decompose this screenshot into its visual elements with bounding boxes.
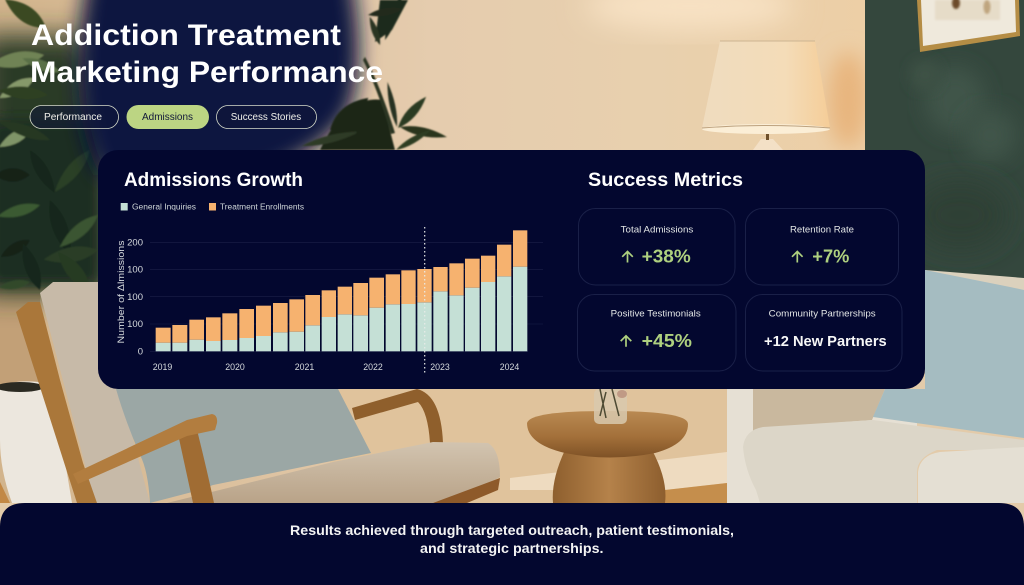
metric card: Positive Testimonials [578, 294, 736, 371]
legend: Treatment Enrollments [220, 202, 304, 212]
legend: General Inquiries [132, 202, 196, 212]
x-axis labels: 2019 [153, 362, 172, 372]
metric card: Community Partnerships [746, 294, 902, 371]
sofa [727, 270, 1024, 503]
dotted marker line [424, 227, 426, 374]
lamp [702, 41, 830, 150]
metric card: Positive Testimonials: Positive Testimonials [611, 309, 701, 320]
x-axis labels: 2022 [363, 362, 383, 372]
footer banner [0, 503, 1024, 585]
heading: Admissions Growth: Admissions Growth [124, 170, 303, 191]
right plant [301, 0, 448, 154]
left plant [0, 0, 106, 295]
bars: general inquiries [156, 267, 527, 351]
chair wood frame [16, 302, 97, 503]
pill: Admissions (active): Admissions [142, 112, 193, 123]
legend [121, 202, 304, 212]
y-axis labels: 100 [127, 319, 143, 330]
pill: Admissions (active) [126, 105, 209, 129]
title [30, 19, 383, 89]
baseboard and floor [510, 452, 727, 503]
side table and vase [527, 389, 688, 503]
stacked bar chart [116, 227, 543, 374]
axis title: Number of Δlmissions [116, 240, 126, 344]
gridlines [150, 242, 543, 351]
metric card: Total Admissions: +38% [642, 247, 691, 267]
front arm [178, 430, 214, 503]
heading: Success Metrics: Success Metrics [588, 170, 743, 191]
x-axis labels: 2023 [430, 362, 450, 372]
pill: Performance [30, 106, 118, 128]
y-axis labels: 200 [127, 238, 143, 248]
metric card: Retention Rate: +7% [812, 247, 849, 267]
filter pills [30, 105, 316, 129]
x-axis labels: 2021 [295, 362, 314, 372]
rear arm [352, 389, 443, 443]
blue cushion [873, 270, 1024, 438]
title backdrop: navy glow [78, 0, 359, 175]
footer text [290, 522, 734, 556]
x-axis labels [153, 362, 519, 372]
pill: Success Stories [216, 106, 316, 128]
y-axis labels: 0 [138, 346, 143, 358]
picture frame [917, 0, 1020, 52]
pill: Performance: Performance [44, 112, 102, 123]
seat cushion [167, 442, 500, 503]
metric card: Community Partnerships: +12 New Partners [764, 334, 887, 350]
armchair [16, 282, 500, 503]
plant pot [0, 381, 72, 503]
green wallpaper wall [865, 0, 1024, 285]
y-axis labels: 100 [127, 292, 143, 303]
x-axis labels: 2020 [225, 362, 245, 372]
title: Marketing Performance [30, 56, 383, 89]
main dashboard panel [98, 150, 925, 389]
metric card: Total Admissions: Total Admissions [621, 225, 694, 236]
footer text: and strategic partnerships. [420, 540, 604, 556]
wall [0, 0, 866, 503]
pill: Success Stories: Success Stories [231, 112, 301, 123]
bars: treatment enrollments [156, 230, 527, 343]
x-axis labels: 2024 [500, 362, 519, 372]
metric card: Retention Rate [746, 208, 898, 285]
metric card: Community Partnerships: Community Partnerships [769, 309, 876, 320]
title: Addiction Treatment [31, 19, 341, 52]
footer text: Results achieved through targeted outreach, patient testimonials, [290, 522, 734, 538]
metric card: Total Admissions [578, 208, 735, 285]
metric card: Retention Rate: Retention Rate [790, 225, 854, 236]
chair back cushion [40, 282, 150, 503]
grey pillow [116, 389, 371, 503]
y-axis labels: 100 [127, 264, 143, 276]
y-axis labels [127, 238, 143, 358]
metric card: Positive Testimonials: +45% [642, 331, 692, 351]
